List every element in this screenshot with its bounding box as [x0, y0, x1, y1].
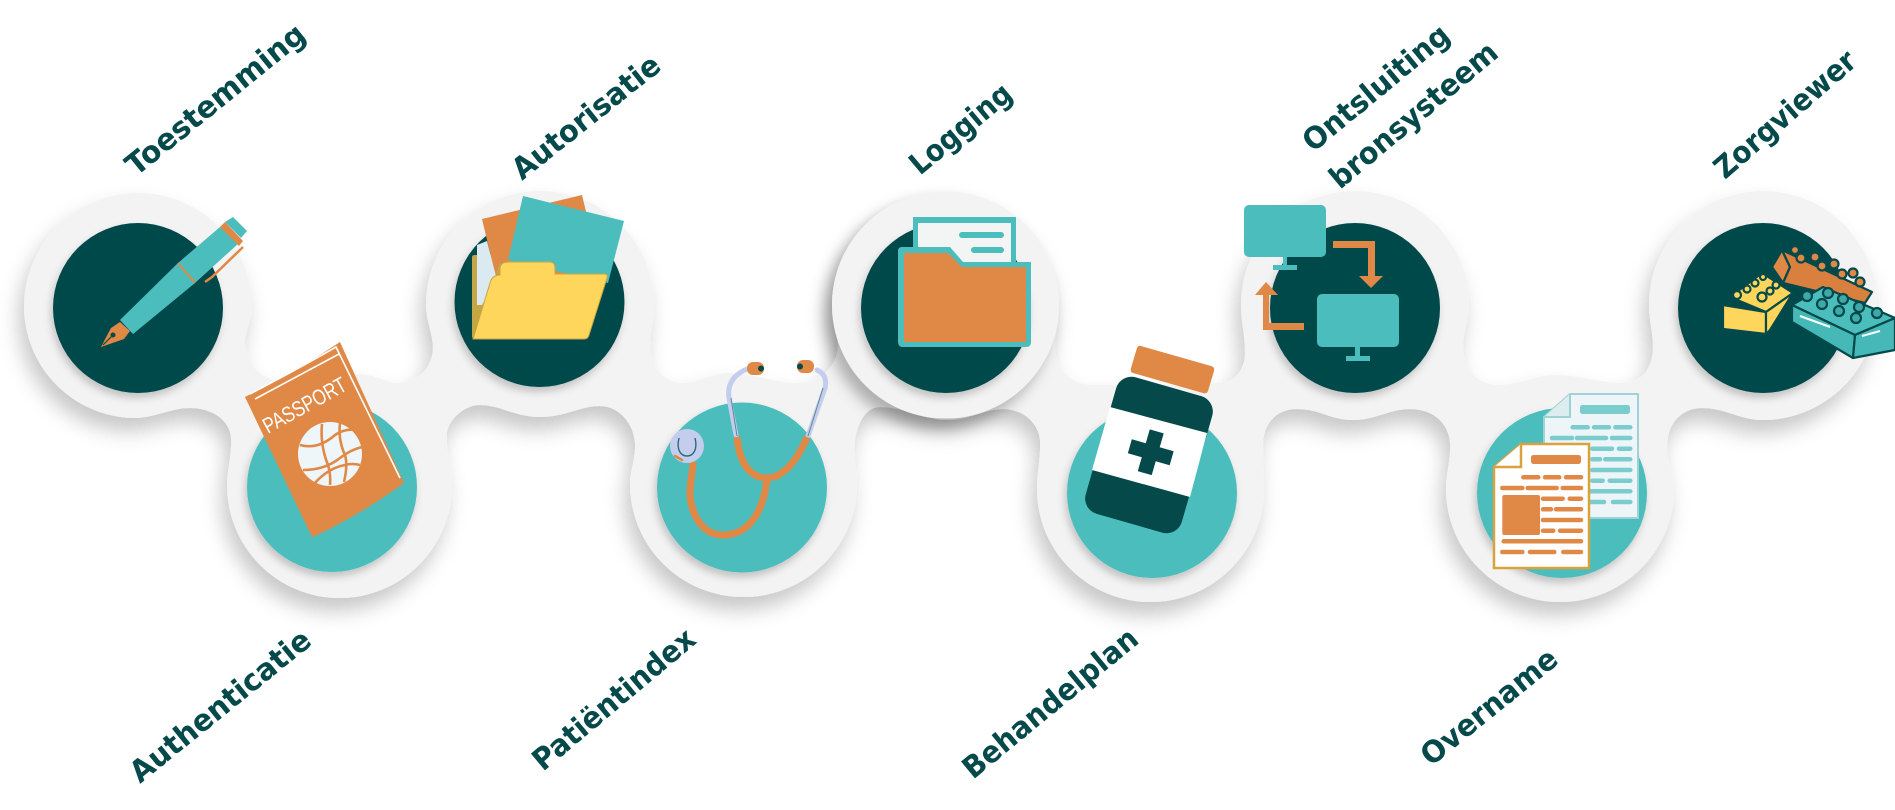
teal circle — [1067, 408, 1237, 578]
dark circle — [1678, 223, 1848, 393]
step: Behandelplan — [956, 346, 1237, 786]
label: Logging — [903, 76, 1019, 182]
dark circle — [861, 223, 1031, 393]
label: Zorgviewer — [1707, 43, 1864, 186]
icon: passport: PASSPORT — [258, 372, 351, 438]
icon: building bricks — [1723, 246, 1895, 358]
icon: folder with file — [898, 217, 1031, 347]
teal circle — [247, 402, 417, 572]
icon: passport — [245, 342, 404, 537]
label: Autorisatie — [505, 48, 668, 187]
icon: documents — [1494, 394, 1638, 568]
step: Overname — [1414, 394, 1647, 773]
icon: open folder with sheets — [472, 195, 624, 339]
label: Patiëntindex — [526, 621, 703, 778]
step: Toestemming — [53, 17, 313, 393]
winding grey band — [24, 191, 1877, 602]
label: Overname — [1414, 642, 1565, 773]
dark circle — [1270, 223, 1440, 393]
icon: fountain pen — [101, 217, 247, 347]
label: Ontsluiting — [1296, 18, 1457, 159]
step: Authenticatie — [123, 342, 417, 790]
icon: two monitors with arrows — [1244, 205, 1399, 361]
icon: stethoscope — [670, 360, 826, 535]
teal circle — [1477, 408, 1647, 578]
step: Autorisatie — [454, 48, 668, 387]
teal circle — [657, 402, 827, 572]
step: Logging — [832, 76, 1059, 419]
icon: medicine bottle — [1081, 346, 1217, 537]
label: Toestemming — [119, 17, 313, 183]
label second line: bronsysteem — [1323, 35, 1505, 196]
label: Authenticatie — [123, 623, 318, 790]
raised disc — [832, 192, 1059, 418]
step: Patiëntindex — [526, 360, 827, 778]
step: Ontsluiting bronsysteem — [1244, 18, 1505, 393]
dark circle — [53, 223, 223, 393]
label: Behandelplan — [956, 621, 1146, 786]
dark circle — [454, 217, 624, 387]
step: Zorgviewer — [1678, 43, 1895, 393]
